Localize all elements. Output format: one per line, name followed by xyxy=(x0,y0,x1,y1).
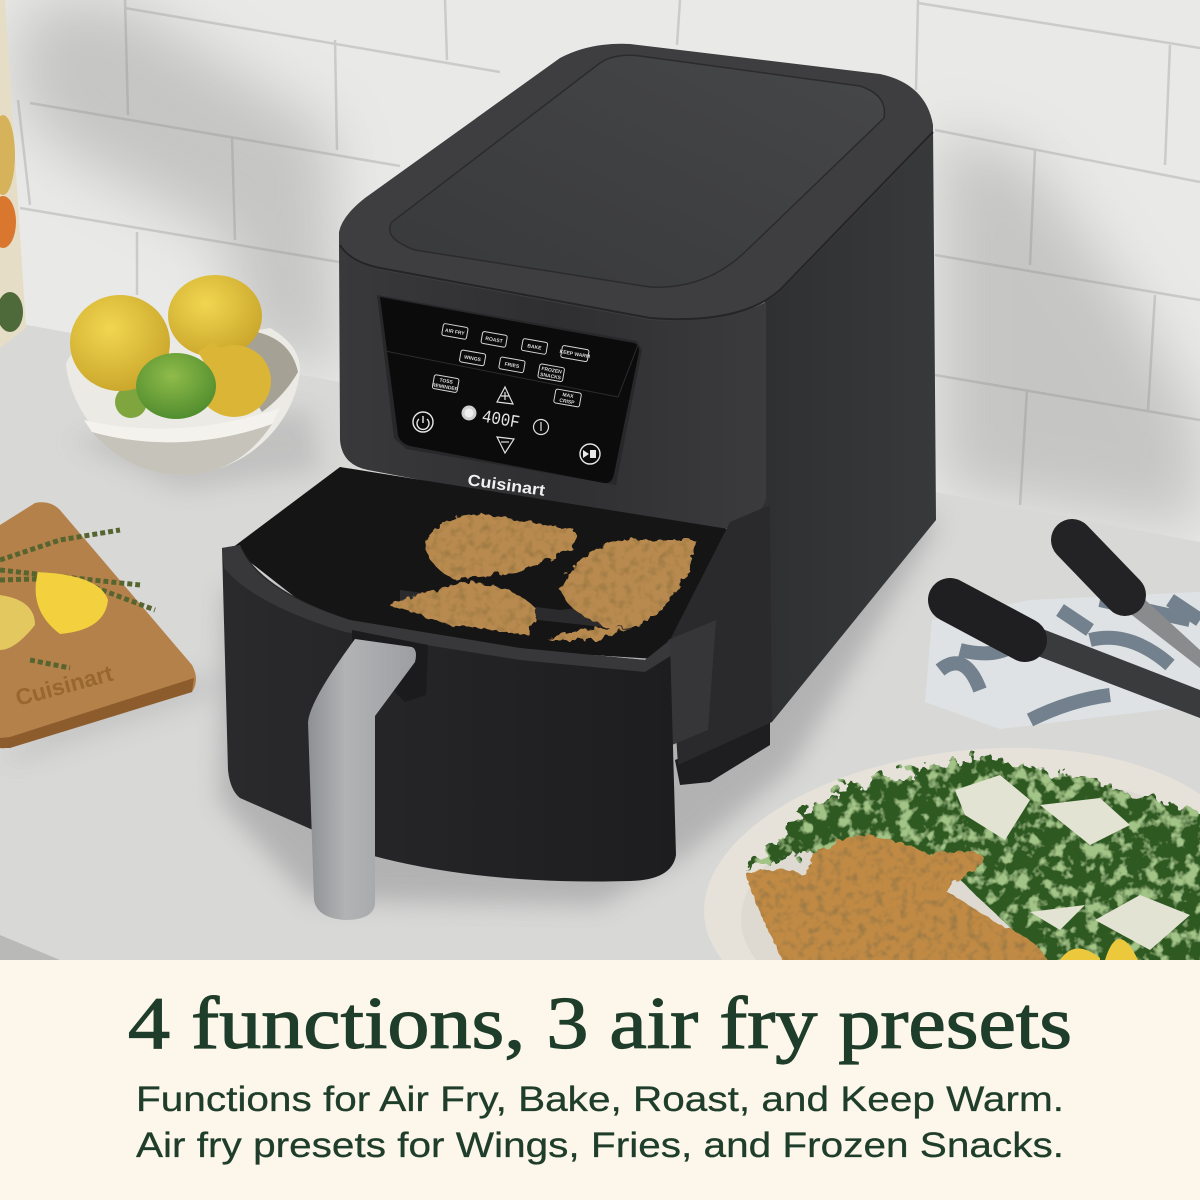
cutting board xyxy=(0,502,196,748)
countertop xyxy=(0,320,1200,960)
button labels: ROAST xyxy=(485,336,503,345)
button labels: CRISP xyxy=(559,398,576,406)
button labels xyxy=(432,328,590,404)
button labels: KEEP WARM xyxy=(559,349,590,360)
basket interior xyxy=(232,467,735,660)
lid rim xyxy=(339,44,933,321)
minus button xyxy=(497,437,514,453)
board logo: Cuisinart xyxy=(13,660,116,711)
wall shadows xyxy=(10,0,1200,530)
button labels: BAKE xyxy=(527,343,542,352)
button labels: MAX xyxy=(562,392,575,400)
feet xyxy=(675,722,770,785)
right side xyxy=(745,125,936,722)
basket right side xyxy=(670,505,772,765)
plus button xyxy=(497,387,513,404)
lid inset xyxy=(390,55,884,287)
subtext line two: Air fry presets for Wings, Fries, and Frozen Snacks. xyxy=(136,1126,1064,1165)
preset buttons xyxy=(432,323,589,414)
panel bezel xyxy=(377,295,642,485)
box at left edge xyxy=(0,0,26,348)
bowl xyxy=(66,328,300,475)
front panel xyxy=(339,245,766,531)
control panel xyxy=(380,297,639,483)
button labels: REMINDER xyxy=(431,382,459,393)
tongs xyxy=(950,540,1200,718)
caption band xyxy=(0,960,1200,1200)
temperature button xyxy=(534,420,548,434)
lemon wedges xyxy=(36,572,108,634)
button labels: TOSS xyxy=(439,378,454,386)
plate with salad and chicken xyxy=(704,748,1200,960)
silver handle xyxy=(308,639,416,920)
counter shadows xyxy=(0,410,940,905)
button labels: FROZEN xyxy=(541,366,563,376)
shaved parmesan xyxy=(955,775,1190,950)
button labels: WINGS xyxy=(464,354,482,363)
temperature readout: 400F xyxy=(480,408,521,434)
lemons and limes xyxy=(115,386,147,418)
button labels: SNACKS xyxy=(540,372,562,382)
arugula salad xyxy=(745,755,1200,975)
napkin xyxy=(925,592,1200,729)
button labels: FRIES xyxy=(504,362,520,370)
food in basket xyxy=(390,514,695,640)
plate xyxy=(704,748,1200,960)
tiled wall xyxy=(0,0,1200,560)
air fryer xyxy=(222,44,936,920)
subtext line one: Functions for Air Fry, Bake, Roast, and Keep Warm. xyxy=(136,1080,1064,1119)
counter front edge xyxy=(0,935,60,960)
lemon pieces xyxy=(1060,948,1100,960)
bowl of lemons xyxy=(66,275,300,475)
handle mount xyxy=(352,630,428,702)
heading: 4 functions, 3 air fry presets xyxy=(128,983,1072,1065)
power button xyxy=(413,412,433,432)
start stop button xyxy=(580,444,600,464)
timer button xyxy=(462,406,476,420)
button labels: AIR FRY xyxy=(444,328,466,337)
brand logo: Cuisinart xyxy=(466,472,547,500)
thyme herbs xyxy=(0,530,155,668)
basket front xyxy=(222,545,676,881)
fried chicken xyxy=(745,835,1050,965)
